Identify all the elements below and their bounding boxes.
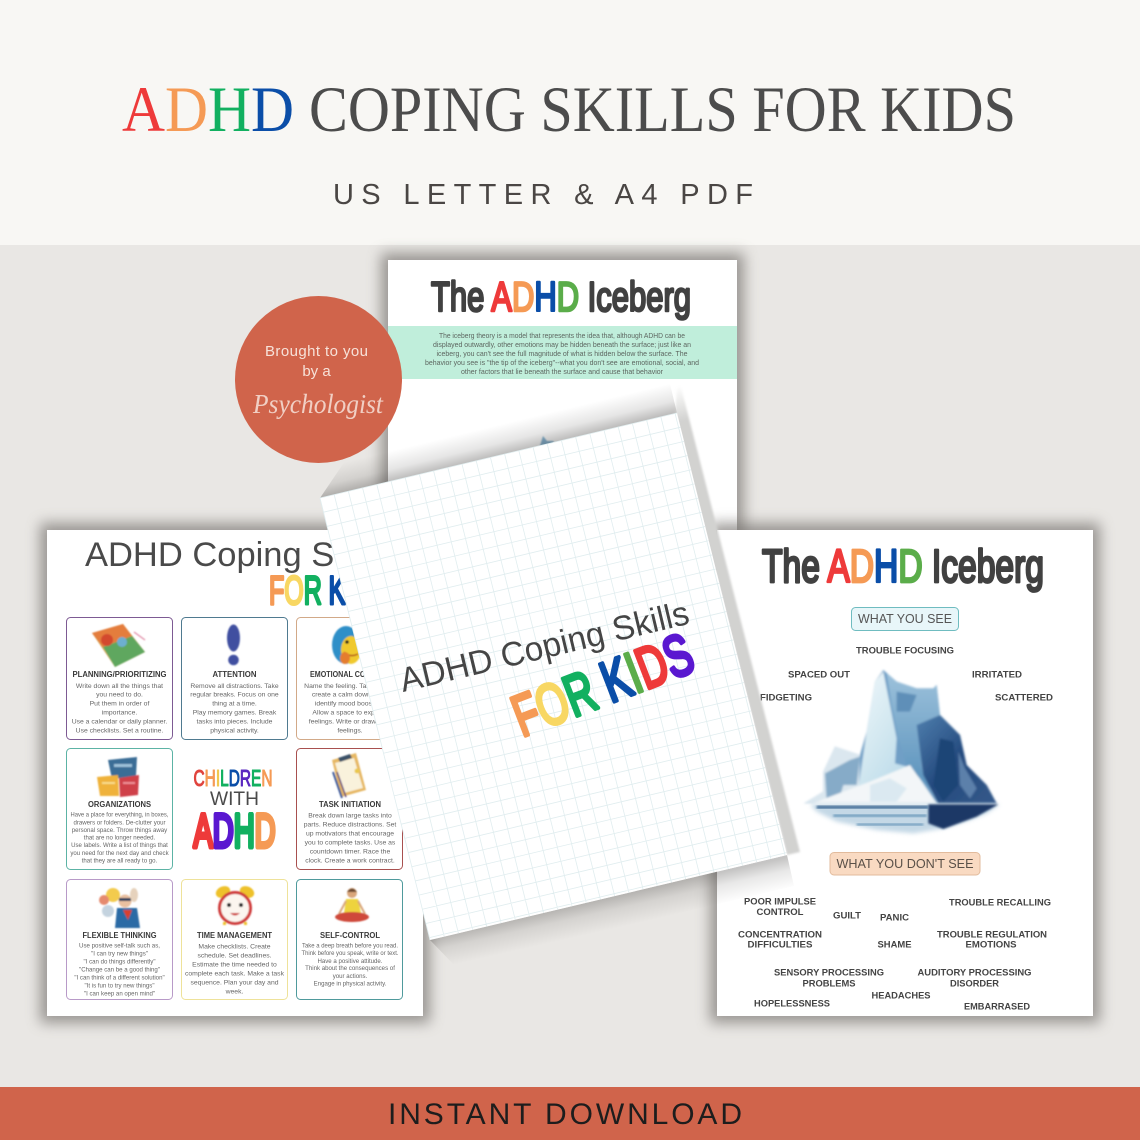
visible symptoms: SCATTERED	[995, 691, 1053, 702]
icon: colorful face	[332, 626, 361, 664]
hidden symptoms: SENSORY PROCESSING	[774, 966, 884, 977]
card: time management	[182, 880, 288, 1000]
card: emotional control: Allow a space to express	[312, 710, 388, 716]
card: organizations: personal space. Throw things away	[72, 827, 168, 834]
card: organizations: ORGANIZATIONS	[88, 800, 151, 809]
card: flexible thinking: "I can do things differently"	[84, 958, 155, 966]
card: flexible thinking: Use positive self-talk such as,	[79, 942, 160, 950]
card: self-control: Engage in physical activity.	[314, 980, 387, 988]
cover title: for kids: FOR KIDS	[503, 621, 702, 749]
mint description band: iceberg, you can't see the full magnitude of what is hidden below the surface. The	[436, 349, 688, 358]
label: what you don't see	[830, 852, 980, 875]
card: flexible thinking	[66, 880, 172, 1000]
card: planning/prioritizing	[66, 618, 172, 740]
panel: coping skills page	[40, 523, 430, 1023]
card: self-control	[296, 880, 402, 1000]
hidden symptoms: TROUBLE RECALLING	[949, 896, 1051, 907]
hidden symptoms: DIFFICULTIES	[748, 938, 812, 949]
heading: for kids: FOR KIDS	[269, 569, 387, 613]
card: time management: Estimate the time needed to	[192, 962, 277, 968]
card: flexible thinking: "I can keep an open mind"	[84, 990, 155, 998]
card: attention: regular breaks. Focus on one	[190, 692, 279, 698]
icon: meditating child	[335, 888, 369, 922]
hidden symptoms: POOR IMPULSE	[744, 895, 816, 906]
hidden symptoms: GUILT	[833, 909, 861, 920]
hidden symptoms: EMOTIONS	[966, 938, 1016, 949]
visible symptoms: SPACED OUT	[788, 668, 850, 679]
hidden symptoms: TROUBLE REGULATION	[937, 928, 1047, 939]
title: ADHD	[122, 74, 294, 146]
card: self-control: Think about the consequences of	[305, 965, 395, 972]
icon: clipboard and pencils	[332, 753, 366, 798]
card: flexible thinking: "It is fun to try new things"	[84, 982, 155, 990]
heading: the adhd iceberg: The ADHD Iceberg	[431, 273, 691, 320]
card: self-control: SELF-CONTROL	[320, 931, 380, 940]
card: flexible thinking: "I can think of a different solution"	[74, 974, 165, 982]
card: attention: Play memory games. Break	[193, 710, 277, 716]
grid paper	[320, 413, 787, 940]
icon: exclamation mark	[227, 624, 240, 665]
card: organizations: that they are all ready to go.	[82, 858, 158, 864]
card: emotional control: feelings. Write or draw your	[309, 718, 392, 726]
card: task initiation	[296, 748, 402, 870]
card: task initiation: Break down large tasks into	[308, 812, 392, 820]
card: time management: Make checklists. Create	[198, 944, 271, 950]
card: self-control: Think before you speak, write or text.	[302, 950, 399, 957]
badge: brought to you by a psychologist: Brought to you	[265, 343, 368, 360]
hidden symptoms: HOPELESSNESS	[754, 997, 830, 1008]
graphic: children with adhd: WITH	[210, 789, 259, 810]
visible symptoms: IRRITATED	[972, 668, 1022, 679]
heading: adhd coping skills: ADHD Coping Skills	[85, 536, 392, 574]
icon: superhero with balloons	[99, 888, 140, 928]
header band	[0, 0, 1140, 245]
card: emotional control: EMOTIONAL CONTROL	[310, 670, 390, 679]
icon: stacked baskets	[97, 757, 139, 797]
hidden symptoms: AUDITORY PROCESSING	[918, 966, 1032, 977]
label: what you see	[852, 608, 958, 630]
card: attention: Remove all distractions. Take	[190, 683, 279, 690]
footer text: INSTANT DOWNLOAD	[388, 1098, 742, 1131]
background: middle band	[0, 245, 1140, 1087]
panel: iceberg intro page	[381, 253, 744, 543]
card: task initiation: TASK INITIATION	[319, 800, 381, 809]
illustration: iceberg	[804, 670, 1000, 833]
hidden symptoms: PROBLEMS	[802, 977, 856, 988]
card: task initiation: you to complete tasks. Use as	[305, 840, 396, 846]
card: attention: ATTENTION	[212, 670, 257, 679]
hidden symptoms: CONCENTRATION	[738, 928, 822, 939]
card: emotional control: Name the feeling. Take time to	[304, 683, 396, 690]
panel: center cover page with shadow	[320, 384, 800, 966]
card: task initiation: countdown timer. Race the	[310, 848, 390, 856]
card: planning/prioritizing: importance.	[102, 710, 137, 716]
card: time management: sequence. Plan your day and	[190, 980, 279, 986]
card: emotional control	[296, 618, 402, 740]
visible symptoms: TROUBLE FOCUSING	[856, 644, 954, 655]
graphic: children with adhd: ADHD	[194, 804, 276, 857]
card: organizations: Use labels. Write a list of things that	[71, 842, 168, 849]
label: what you see: WHAT YOU SEE	[858, 611, 952, 626]
cover title: adhd coping skills: ADHD Coping Skills	[396, 594, 693, 700]
card: planning/prioritizing: Use a calendar or daily planner.	[72, 718, 167, 726]
badge: brought to you by a psychologist: by a	[302, 363, 331, 380]
hidden symptoms: DISORDER	[950, 977, 999, 988]
icon: alarm clock	[214, 884, 256, 925]
subtitle: US LETTER & A4 PDF	[333, 179, 753, 211]
hidden symptoms: EMBARRASED	[964, 1000, 1030, 1011]
iceberg tip peeking out	[539, 436, 557, 449]
card: organizations: that are no longer needed.	[84, 834, 156, 842]
card: attention: thing at a time.	[212, 700, 257, 708]
card: self-control: Have a positive attitude.	[317, 958, 383, 965]
card: task initiation: parts. Reduce distractions. Set	[304, 822, 396, 828]
card: emotional control: identify mood boosters.	[315, 700, 385, 708]
icon: storybook	[92, 624, 145, 667]
card: emotional control: feelings.	[337, 728, 363, 734]
card: task initiation: clock. Create a work contract.	[305, 858, 395, 864]
card: attention: tasks into pieces. Include	[197, 718, 273, 726]
footer band	[0, 1087, 1140, 1140]
hidden symptoms: PANIC	[880, 911, 909, 922]
mint description band: displayed outwardly, other emotions may be hidden beneath the surface; just like an	[433, 340, 691, 349]
card: time management: week.	[225, 988, 243, 996]
card: attention	[182, 618, 288, 740]
card: time management: TIME MANAGEMENT	[197, 931, 272, 940]
card: task initiation: up motivators that encourage	[306, 830, 394, 838]
mint description band: other factors that lie beneath the surface and cause that behavior	[461, 367, 664, 376]
hidden symptoms: HEADACHES	[872, 989, 930, 1000]
title: COPING SKILLS FOR KIDS	[309, 74, 1016, 146]
card: planning/prioritizing: you need to do.	[96, 692, 143, 698]
badge: brought to you by a psychologist: Psychologist	[252, 389, 384, 419]
card: self-control: Take a deep breath before you read.	[302, 942, 398, 950]
card: flexible thinking: FLEXIBLE THINKING	[82, 931, 156, 940]
card: time management: complete each task. Make a task	[185, 970, 285, 978]
mint description band: The iceberg theory is a model that represents the idea that, although ADHD can be	[439, 331, 685, 340]
mint description band: behavior you see is "the tip of the iceberg"--what you don't see are emotional, social, and	[425, 358, 699, 367]
visible symptoms: FIDGETING	[760, 691, 812, 702]
card: planning/prioritizing: Write down all the things that	[76, 683, 163, 690]
hidden symptoms: SHAME	[878, 938, 912, 949]
label: what you don't see: WHAT YOU DON'T SEE	[836, 856, 974, 871]
mint description band	[388, 326, 737, 379]
card: emotional control: create a calm down area,	[312, 692, 388, 698]
card: organizations: drawers or folders. De-clutter your	[73, 819, 166, 826]
card: planning/prioritizing: Put them in order of	[90, 700, 149, 708]
card: self-control: your actions.	[333, 973, 368, 980]
graphic: children with adhd: CHILDREN	[194, 765, 272, 791]
card: organizations	[66, 748, 172, 870]
panel: iceberg page	[710, 523, 1100, 1023]
visible symptoms	[760, 644, 1053, 702]
heading: the adhd iceberg: The ADHD Iceberg	[762, 540, 1044, 592]
card: organizations: you need for the next day and check	[70, 850, 170, 857]
hidden symptoms: CONTROL	[756, 906, 804, 917]
card: planning/prioritizing: Use checklists. Set a routine.	[76, 728, 163, 734]
graphic: children with adhd	[194, 765, 276, 857]
card: time management: schedule. Set deadlines.	[197, 952, 272, 960]
badge: brought to you by a psychologist	[235, 296, 402, 463]
hidden symptoms	[738, 895, 1051, 1011]
card: flexible thinking: "I can try new things"	[91, 950, 148, 958]
card: flexible thinking: "Change can be a good thing"	[79, 966, 160, 974]
card: attention: physical activity.	[210, 728, 259, 734]
water reflection	[810, 804, 1000, 833]
card: organizations: Have a place for everything, in boxes,	[70, 812, 169, 818]
card: planning/prioritizing: PLANNING/PRIORITIZING	[72, 670, 166, 679]
